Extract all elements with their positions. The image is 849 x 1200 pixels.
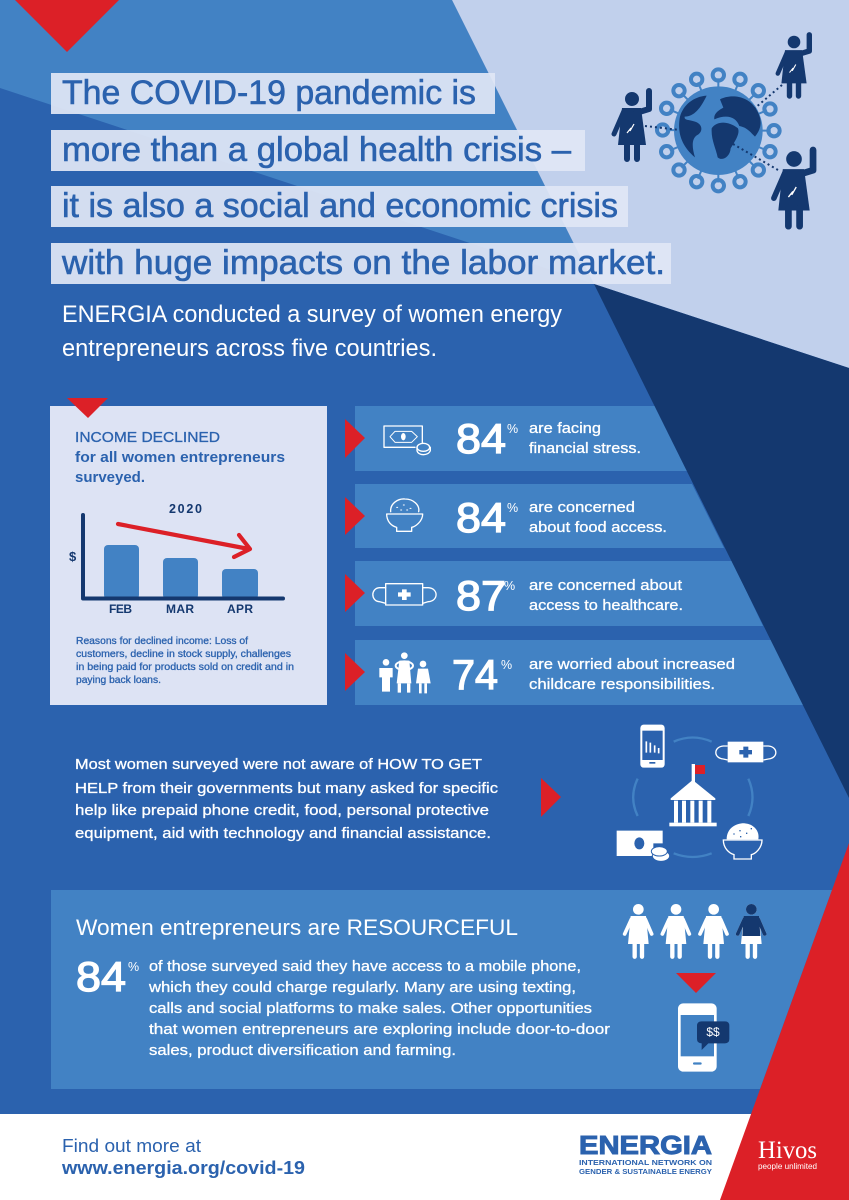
title text: with huge impacts on the labor market. xyxy=(61,244,665,282)
intro text xyxy=(62,301,562,362)
panel heading xyxy=(75,429,285,486)
icon: phone with message: $$ xyxy=(706,1025,720,1039)
bar chart: $ xyxy=(69,549,77,564)
footer text: www.energia.org/covid-19 xyxy=(61,1158,305,1178)
help text: equipment, aid with technology and financial assistance. xyxy=(75,825,491,842)
row: financial stress xyxy=(345,406,688,471)
panel heading: surveyed. xyxy=(75,469,145,486)
row: food access: about food access. xyxy=(529,519,667,536)
row: healthcare: access to healthcare. xyxy=(529,597,683,614)
woman top right xyxy=(778,35,809,96)
bar chart: 2020 xyxy=(169,502,202,516)
title text: more than a global health crisis – xyxy=(62,131,571,169)
red corner wedge xyxy=(720,843,849,1200)
row: childcare: 74 xyxy=(452,651,498,698)
paragraph: calls and social platforms to make sales. Other opportunities xyxy=(149,1000,592,1017)
help text: help like prepaid phone credit, food, personal protective xyxy=(75,802,489,819)
red arrow marker xyxy=(541,778,561,817)
title text: it is also a social and economic crisis xyxy=(62,187,618,225)
help text xyxy=(75,756,499,842)
background: lighter blue wedge xyxy=(0,0,594,284)
row: financial stress: financial stress. xyxy=(529,440,641,457)
paragraph: which they could charge regularly. Many are using texting, xyxy=(148,979,576,996)
reasons note: customers, decline in stock supply, challenges xyxy=(76,649,291,660)
intro text: entrepreneurs across five countries. xyxy=(62,335,437,362)
row: food access: % xyxy=(507,501,518,515)
globe with rings xyxy=(657,69,780,191)
logo: ENERGIA: INTERNATIONAL NETWORK ON xyxy=(579,1160,712,1167)
icon: money xyxy=(384,426,430,455)
row: food access: 84 xyxy=(456,494,506,541)
row: food access: are concerned xyxy=(529,499,635,516)
panel heading: Women entrepreneurs are RESOURCEFUL xyxy=(76,915,518,940)
row: childcare: are worried about increased xyxy=(529,656,735,673)
reasons note: in being paid for products sold on credit and in xyxy=(76,662,294,673)
woman bottom right xyxy=(774,150,813,226)
paragraph: of those surveyed said they have access to a mobile phone, xyxy=(149,958,581,975)
reasons note: Reasons for declined income: Loss of xyxy=(76,636,248,647)
icon: mask xyxy=(373,584,436,605)
help text: HELP from their governments but many asked for specific xyxy=(75,780,499,797)
paragraph: that women entrepreneurs are exploring include door-to-door xyxy=(149,1021,610,1038)
background: dark navy wedge xyxy=(594,284,849,798)
row: healthcare: 87 xyxy=(456,572,506,619)
paragraph xyxy=(148,958,610,1059)
logo: Hivos: people unlimited xyxy=(758,1162,817,1171)
bar chart: APR xyxy=(227,602,253,616)
phone xyxy=(640,725,665,768)
dotted connectors xyxy=(645,85,782,170)
red triangle xyxy=(676,973,716,993)
row: financial stress: are facing xyxy=(529,420,601,437)
bowl xyxy=(723,823,762,859)
bar chart xyxy=(69,502,283,616)
title text xyxy=(61,74,665,282)
intro text: ENERGIA conducted a survey of women energy xyxy=(62,301,562,328)
logo: Hivos: Hivos xyxy=(758,1137,817,1164)
title block xyxy=(51,73,671,284)
logo: ENERGIA: GENDER & SUSTAINABLE ENERGY xyxy=(579,1169,712,1176)
logo: ENERGIA: ENERGIA xyxy=(579,1130,712,1160)
money xyxy=(617,831,670,861)
footer text xyxy=(61,1135,305,1178)
stat rows xyxy=(345,406,803,705)
panel heading: for all women entrepreneurs xyxy=(75,449,285,466)
panel: women entrepreneurs are resourceful xyxy=(51,890,832,1089)
bar chart: FEB xyxy=(109,602,132,616)
title highlight bars xyxy=(51,73,671,284)
ring arcs xyxy=(633,737,752,857)
logo: ENERGIA xyxy=(579,1130,712,1176)
big stat: 84 xyxy=(76,953,126,1000)
woman left xyxy=(614,91,649,159)
row: healthcare: are concerned about xyxy=(529,577,683,594)
help text: Most women surveyed were not aware of HOW TO GET xyxy=(75,756,482,773)
icon: four women xyxy=(625,904,765,957)
bar chart: MAR xyxy=(166,602,194,616)
row: food access xyxy=(345,484,724,548)
row: childcare: childcare responsibilities. xyxy=(529,676,715,693)
paragraph: sales, product diversification and farming. xyxy=(149,1042,456,1059)
row: healthcare xyxy=(345,561,763,626)
reasons note: paying back loans. xyxy=(76,675,161,686)
red marker xyxy=(67,398,108,418)
icon: family xyxy=(379,652,431,693)
icon group: government help xyxy=(617,725,776,861)
big stat: % xyxy=(128,960,139,974)
reasons note xyxy=(76,636,294,686)
arrow xyxy=(118,524,250,557)
panel heading: INCOME DECLINED xyxy=(75,429,220,446)
footer xyxy=(0,843,849,1200)
background: pale blue wedge xyxy=(452,0,849,368)
row: healthcare: % xyxy=(504,579,515,593)
icon: phone with message xyxy=(678,1003,729,1072)
red triangle top xyxy=(15,0,119,52)
government building xyxy=(669,764,717,826)
icon: globe with women connected xyxy=(614,35,813,226)
footer text: Find out more at xyxy=(62,1135,201,1156)
title text: The COVID-19 pandemic is xyxy=(62,74,476,112)
panel: income declined xyxy=(50,398,327,705)
row: financial stress: % xyxy=(507,422,518,436)
row: childcare xyxy=(345,640,803,705)
row: childcare: % xyxy=(501,658,512,672)
mask xyxy=(716,742,776,762)
icon: rice bowl xyxy=(387,499,423,531)
row: financial stress: 84 xyxy=(456,415,506,462)
